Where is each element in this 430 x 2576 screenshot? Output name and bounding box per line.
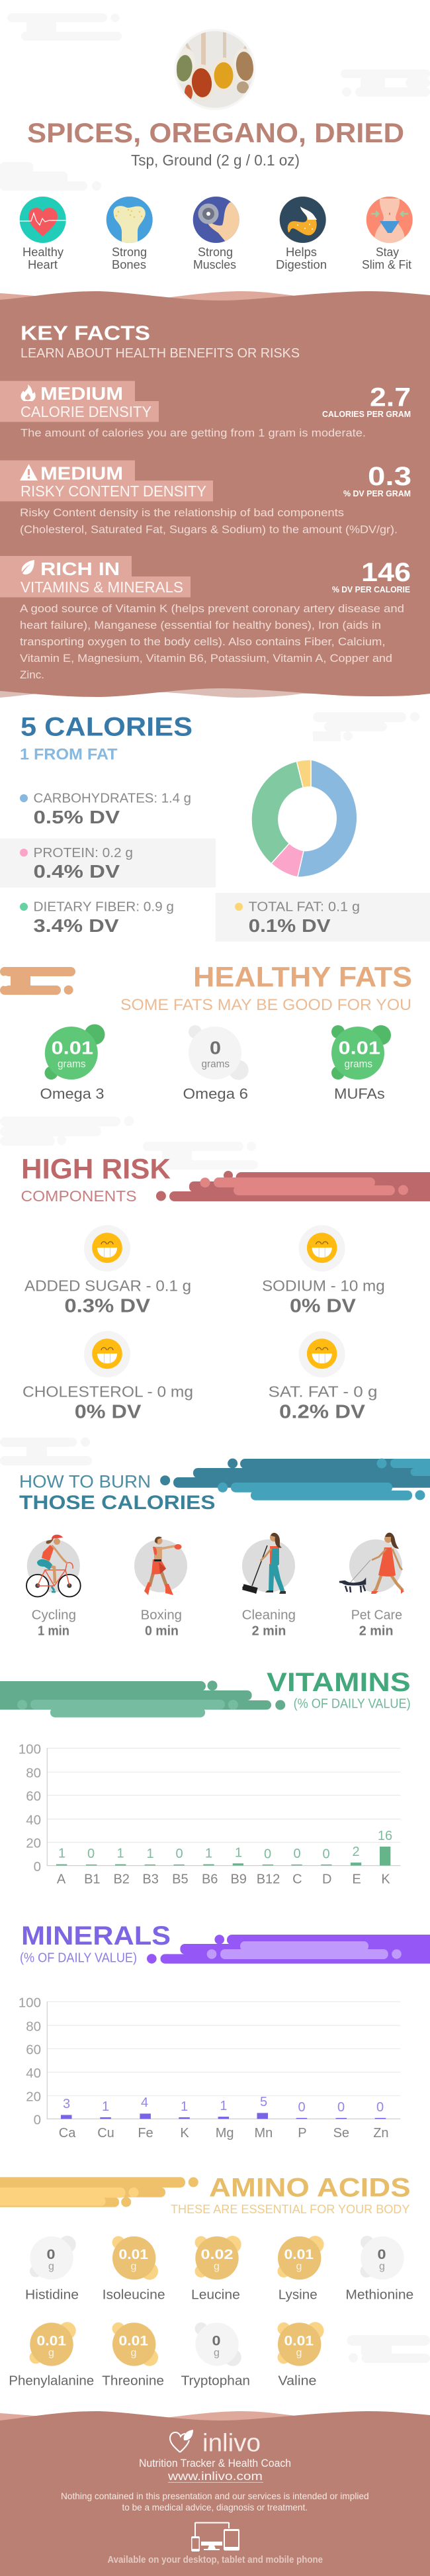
bar chart: vitamins: B6	[202, 1872, 218, 1886]
donut chart: macronutrients	[251, 760, 357, 877]
label: stay slim and fit: Slim & Fit	[362, 258, 411, 271]
vitamins and minerals block	[0, 556, 411, 681]
bar chart: minerals: 5	[260, 2095, 267, 2109]
risky content density block: Risky Content density is the relationship of bad components	[20, 506, 344, 519]
bar chart: minerals: P	[298, 2126, 307, 2140]
bar chart: minerals: 4	[141, 2095, 148, 2110]
bar chart: vitamins: 0	[264, 1847, 271, 1861]
bar chart: minerals: Cu	[97, 2126, 114, 2140]
bar chart: vitamins: 80	[26, 1766, 41, 1780]
activity: cycling	[26, 1535, 81, 1596]
amino acid: isoleucine: 0.01	[119, 2247, 148, 2262]
icon: healthy heart	[19, 197, 67, 243]
amino acid: phenylalanine: 0.01	[37, 2333, 66, 2348]
bar chart: minerals: 1	[102, 2099, 109, 2114]
footer note: Available on your desktop, tablet and mobile phone	[107, 2555, 323, 2565]
subheading: components: COMPONENTS	[21, 1187, 136, 1205]
bar chart: vitamins: 40	[26, 1813, 41, 1828]
vitamins and minerals block: VITAMINS & MINERALS	[21, 578, 183, 596]
label: boxing: 0 min	[145, 1624, 179, 1639]
bar chart: vitamins: 1	[235, 1845, 242, 1860]
amino acid: lysine: Lysine	[279, 2288, 318, 2303]
component: cholesterol: CHOLESTEROL - 0 mg	[22, 1383, 193, 1401]
bar chart: vitamins	[19, 1742, 400, 1886]
legend: total fat: TOTAL FAT: 0.1 g	[249, 900, 360, 915]
amino acid: leucine: g	[214, 2261, 220, 2272]
amino acid: methionine	[345, 2236, 413, 2303]
icon: devices	[191, 2522, 239, 2552]
title: SPICES, OREGANO, DRIED	[27, 117, 404, 148]
amino acid: methionine: 0	[377, 2247, 386, 2262]
disclaimer: Nothing contained in this presentation and our services is intended or implied	[61, 2491, 369, 2501]
heading: how to burn: HOW TO BURN	[19, 1471, 151, 1491]
bar chart: vitamins: 0	[322, 1847, 330, 1861]
badge: omega 6: grams	[201, 1059, 230, 1070]
bar chart: vitamins: 2	[352, 1845, 360, 1859]
amino acid: valine: 0.01	[284, 2333, 314, 2348]
activity: pet care	[339, 1533, 404, 1594]
amino acid: isoleucine: g	[131, 2261, 136, 2272]
heading: healthy fats: HEALTHY FATS	[193, 962, 412, 993]
label: strong muscles: Strong	[198, 246, 233, 259]
legend: dietary fiber: 3.4% DV	[33, 915, 119, 936]
icon: strong bones	[107, 197, 153, 245]
badge: omega 6: Omega 6	[183, 1085, 248, 1102]
vitamins and minerals block: Vitamin E, Magnesium, Vitamin B6, Potassium, Vitamin A, Copper and	[20, 652, 392, 665]
amino acid: lysine	[278, 2236, 324, 2303]
vitamins and minerals block: transporting oxygen to the body cells). Also contains Fiber, Calcium,	[20, 635, 385, 648]
bar chart: minerals: 0	[376, 2100, 384, 2115]
background clouds: high risk	[0, 1116, 258, 1170]
bar chart: minerals: 0	[337, 2100, 345, 2115]
bar chart: minerals: 0	[34, 2113, 41, 2127]
bar chart: vitamins: 0	[34, 1859, 41, 1874]
icon: leaf	[22, 560, 34, 575]
heading: those calories: THOSE CALORIES	[19, 1492, 216, 1514]
calorie density block: 2.7	[370, 383, 411, 412]
background cloud: calories	[313, 712, 419, 741]
panel: key facts	[0, 291, 430, 698]
bar chart: vitamins: C	[292, 1872, 302, 1886]
legend: dietary fiber	[20, 900, 174, 936]
bar chart: vitamins: B9	[230, 1872, 247, 1886]
bar chart: vitamins: 16	[378, 1829, 392, 1843]
bar chart: vitamins: 60	[26, 1789, 41, 1804]
legend: total fat	[216, 893, 430, 942]
decoration: vitamins streaks	[0, 1680, 285, 1718]
icon: flame	[21, 385, 36, 401]
bar chart: minerals: 80	[26, 2019, 41, 2034]
label: healthy heart: Healthy	[22, 246, 64, 259]
calorie density block: The amount of calories you are getting from 1 gram is moderate.	[21, 427, 366, 439]
bar chart: vitamins: 1	[205, 1846, 212, 1861]
component: saturated fat: 0.2% DV	[279, 1402, 366, 1423]
bar chart: minerals: 3	[63, 2097, 70, 2111]
decoration: burn section streaks	[160, 1459, 430, 1500]
component: cholesterol	[22, 1331, 193, 1423]
bar chart: vitamins: E	[352, 1872, 361, 1886]
bar chart: minerals: Mg	[216, 2126, 234, 2140]
amino acid: threonine	[102, 2323, 164, 2388]
calorie density block	[0, 381, 411, 439]
bar chart: vitamins: B2	[113, 1872, 130, 1886]
bar chart: vitamins: 1	[116, 1846, 124, 1861]
label: cycling: Cycling	[32, 1608, 76, 1623]
heading: vitamins: VITAMINS	[267, 1668, 411, 1697]
label: pet care: Pet Care	[351, 1608, 402, 1623]
label: pet care	[351, 1608, 402, 1639]
bar chart: vitamins: 0	[293, 1847, 301, 1861]
vitamins and minerals block: A good source of Vitamin K (helps prevent coronary artery disease and	[20, 602, 404, 615]
label: boxing: Boxing	[141, 1608, 182, 1623]
subheading: amino acids: THESE ARE ESSENTIAL FOR YOUR BODY	[171, 2202, 409, 2216]
vitamins and minerals block: Zinc.	[20, 668, 44, 681]
background clouds: header	[0, 13, 430, 191]
label: strong muscles: Muscles	[193, 258, 236, 271]
badge: omega 6	[183, 1025, 249, 1102]
tagline: Nutrition Tracker & Health Coach	[139, 2457, 291, 2469]
label: cleaning	[242, 1608, 296, 1639]
legend: protein	[0, 839, 216, 888]
component: sodium: SODIUM - 10 mg	[262, 1277, 385, 1295]
bar chart: vitamins: K	[381, 1872, 390, 1886]
component: cholesterol: 0% DV	[75, 1402, 142, 1423]
disclaimer	[61, 2491, 369, 2512]
decoration: high risk streaks	[156, 1171, 430, 1201]
amino acid: threonine: Threonine	[102, 2373, 164, 2388]
logo: inlivo heart	[170, 2430, 193, 2452]
subheading: key facts: LEARN ABOUT HEALTH BENEFITS OR RISKS	[21, 346, 300, 361]
calorie density block: CALORIE DENSITY	[21, 403, 151, 420]
panel: footer	[0, 2411, 430, 2576]
subtitle: serving size: Tsp, Ground (2 g / 0.1 oz)	[131, 152, 300, 169]
heading: amino acids: AMINO ACIDS	[209, 2174, 411, 2203]
bar chart: vitamins: B12	[257, 1872, 280, 1886]
label: strong bones	[112, 246, 147, 271]
label: helps digestion	[276, 246, 327, 271]
legend: protein: 0.4% DV	[33, 861, 120, 882]
amino acid: phenylalanine	[9, 2322, 94, 2388]
bar chart: vitamins: 0	[175, 1847, 183, 1861]
amino acid: threonine: 0.01	[119, 2333, 148, 2348]
amino acid: phenylalanine: Phenylalanine	[9, 2373, 94, 2388]
label: strong bones: Strong	[112, 246, 147, 259]
amino acid: tryptophan: g	[214, 2347, 220, 2358]
risky content density block: (Cholesterol, Saturated Fat, Sugars & Sodium) to the amount (%DV/gr).	[20, 523, 398, 535]
heading: high risk: HIGH RISK	[21, 1154, 171, 1185]
bar chart: vitamins: 0	[87, 1847, 95, 1861]
badge: mufas: MUFAs	[334, 1085, 385, 1102]
label: cleaning: 2 min	[252, 1624, 286, 1639]
bar chart: vitamins: 20	[26, 1836, 41, 1851]
risky content density block: 0.3	[368, 462, 411, 491]
bar chart: vitamins: 100	[19, 1742, 41, 1757]
bar chart: minerals: 20	[26, 2089, 41, 2104]
icon: stay slim and fit	[366, 197, 413, 245]
vitamins and minerals block: heart failure), Manganese (essential for healthy bones), Iron (aids in	[20, 619, 381, 631]
label: helps digestion: Helps	[286, 246, 317, 259]
badge: mufas: grams	[344, 1059, 372, 1070]
subheading: vitamins daily value: (% OF DAILY VALUE)	[294, 1697, 411, 1712]
bar chart: minerals	[19, 1995, 400, 2140]
bar chart: minerals: 60	[26, 2042, 41, 2057]
subheading: minerals daily value: (% OF DAILY VALUE)	[20, 1951, 137, 1966]
amino acid: isoleucine: Isoleucine	[103, 2288, 165, 2303]
icon: helps digestion	[280, 197, 326, 243]
amino acid: lysine: g	[296, 2261, 302, 2272]
bar chart: vitamins: B5	[172, 1872, 189, 1886]
vitamins and minerals block: RICH IN	[40, 559, 120, 579]
decoration: minerals streaks	[147, 1935, 430, 1964]
bar chart: vitamins: B3	[142, 1872, 159, 1886]
label: stay slim and fit: Stay	[376, 246, 399, 259]
bar chart: minerals: Mn	[255, 2126, 273, 2140]
icon: warning triangle	[20, 464, 38, 481]
label: cycling: 1 min	[38, 1624, 69, 1639]
legend: carbohydrates: CARBOHYDRATES: 1.4 g	[33, 792, 191, 806]
legend: dietary fiber: DIETARY FIBER: 0.9 g	[33, 900, 174, 915]
component: saturated fat: SAT. FAT - 0 g	[269, 1383, 377, 1401]
bar chart: minerals: 1	[220, 2099, 227, 2113]
component: added sugar: ADDED SUGAR - 0.1 g	[24, 1277, 191, 1295]
legend: protein: PROTEIN: 0.2 g	[33, 846, 133, 860]
subheading: from fat: 1 FROM FAT	[20, 746, 118, 764]
label: strong bones: Bones	[112, 258, 146, 271]
legend: total fat: 0.1% DV	[249, 915, 331, 936]
amino acid: leucine: Leucine	[191, 2288, 240, 2303]
bar chart: vitamins: 1	[146, 1847, 154, 1861]
label: cycling	[32, 1608, 76, 1639]
legend: carbohydrates: 0.5% DV	[33, 807, 120, 827]
badge: omega 3	[40, 1025, 105, 1102]
component: sodium	[262, 1225, 385, 1317]
component: added sugar	[24, 1225, 191, 1317]
calorie density block: CALORIES PER GRAM	[322, 409, 411, 419]
label: strong muscles	[193, 246, 236, 271]
bar chart: minerals: 100	[19, 1995, 41, 2010]
amino acid: histidine: g	[48, 2261, 54, 2272]
bar chart: minerals: Zn	[373, 2126, 389, 2140]
badge: omega 3: Omega 3	[40, 1085, 105, 1102]
bar chart: minerals: 1	[181, 2099, 188, 2114]
bar chart: minerals: Se	[333, 2126, 349, 2140]
badge: omega 6: 0	[210, 1038, 221, 1058]
risky content density block	[0, 461, 411, 535]
icon: strong muscles	[193, 197, 242, 245]
amino acid: threonine: g	[131, 2347, 136, 2358]
bar chart: minerals: 0	[298, 2100, 306, 2115]
bar chart: vitamins: 1	[58, 1846, 65, 1861]
bar chart: minerals: 40	[26, 2066, 41, 2081]
image: spices on spoons	[171, 26, 257, 110]
activity: boxing	[134, 1537, 187, 1595]
badge: mufas	[331, 1025, 391, 1102]
amino acid: lysine: 0.01	[284, 2247, 314, 2262]
label: stay slim and fit	[362, 246, 411, 271]
bar chart: minerals: K	[180, 2126, 189, 2140]
risky content density block: MEDIUM	[40, 463, 123, 483]
bar chart: vitamins: A	[57, 1872, 66, 1886]
vitamins and minerals block: 146	[361, 558, 411, 587]
label: healthy heart	[22, 246, 64, 271]
bar chart: minerals: Ca	[59, 2126, 76, 2140]
decoration: amino acids streaks	[0, 2177, 198, 2207]
amino acid: tryptophan	[181, 2323, 250, 2388]
calorie density block: MEDIUM	[40, 383, 123, 404]
risky content density block: RISKY CONTENT DENSITY	[21, 483, 206, 500]
bar chart: minerals: Fe	[138, 2126, 153, 2140]
amino acid: histidine	[25, 2236, 79, 2303]
vitamins and minerals block: % DV PER CALORIE	[332, 584, 410, 594]
decoration: healthy fats streaks	[0, 967, 75, 995]
badge: omega 3: grams	[58, 1059, 86, 1070]
risky content density block: % DV PER GRAM	[343, 488, 411, 498]
bar chart: vitamins: B1	[84, 1872, 101, 1886]
amino acid: valine	[278, 2322, 324, 2388]
component: added sugar: 0.3% DV	[64, 1296, 151, 1317]
badge: mufas: 0.01	[339, 1038, 380, 1058]
amino acid: valine: Valine	[278, 2373, 316, 2388]
amino acid: histidine: 0	[46, 2247, 56, 2262]
heading: key facts: KEY FACTS	[21, 322, 150, 344]
amino acid: tryptophan: 0	[212, 2333, 221, 2348]
label: healthy heart: Heart	[28, 258, 58, 271]
label: cleaning: Cleaning	[242, 1608, 296, 1623]
heading: minerals: MINERALS	[21, 1921, 171, 1951]
disclaimer: to be a medical advice, diagnosis or treatment.	[122, 2502, 308, 2512]
amino acid: methionine: Methionine	[345, 2288, 413, 2303]
component: saturated fat	[269, 1331, 377, 1423]
heading: calories: 5 CALORIES	[21, 713, 193, 742]
amino acid: leucine: 0.02	[201, 2247, 233, 2262]
amino acid: valine: g	[296, 2347, 302, 2358]
logo: inlivo wordmark: inlivo	[202, 2429, 261, 2457]
background cloud: amino acids	[347, 2335, 430, 2363]
amino acid: histidine: Histidine	[25, 2288, 79, 2303]
subheading: healthy fats: SOME FATS MAY BE GOOD FOR YOU	[120, 996, 411, 1014]
legend: carbohydrates	[20, 792, 191, 827]
amino acid: tryptophan: Tryptophan	[181, 2373, 250, 2388]
label: boxing	[141, 1608, 182, 1639]
amino acid: methionine: g	[379, 2261, 385, 2272]
amino acid: phenylalanine: g	[48, 2347, 54, 2358]
background cloud: burn section	[0, 1438, 92, 1465]
component: sodium: 0% DV	[290, 1296, 357, 1317]
website link: www.inlivo.com	[167, 2469, 263, 2483]
label: pet care: 2 min	[359, 1624, 393, 1639]
bar chart: vitamins: D	[322, 1872, 331, 1886]
amino acid: leucine	[191, 2236, 241, 2303]
activity: cleaning	[242, 1533, 295, 1594]
badge: omega 3: 0.01	[52, 1038, 93, 1058]
amino acid: isoleucine	[103, 2236, 165, 2303]
label: helps digestion: Digestion	[276, 258, 327, 271]
